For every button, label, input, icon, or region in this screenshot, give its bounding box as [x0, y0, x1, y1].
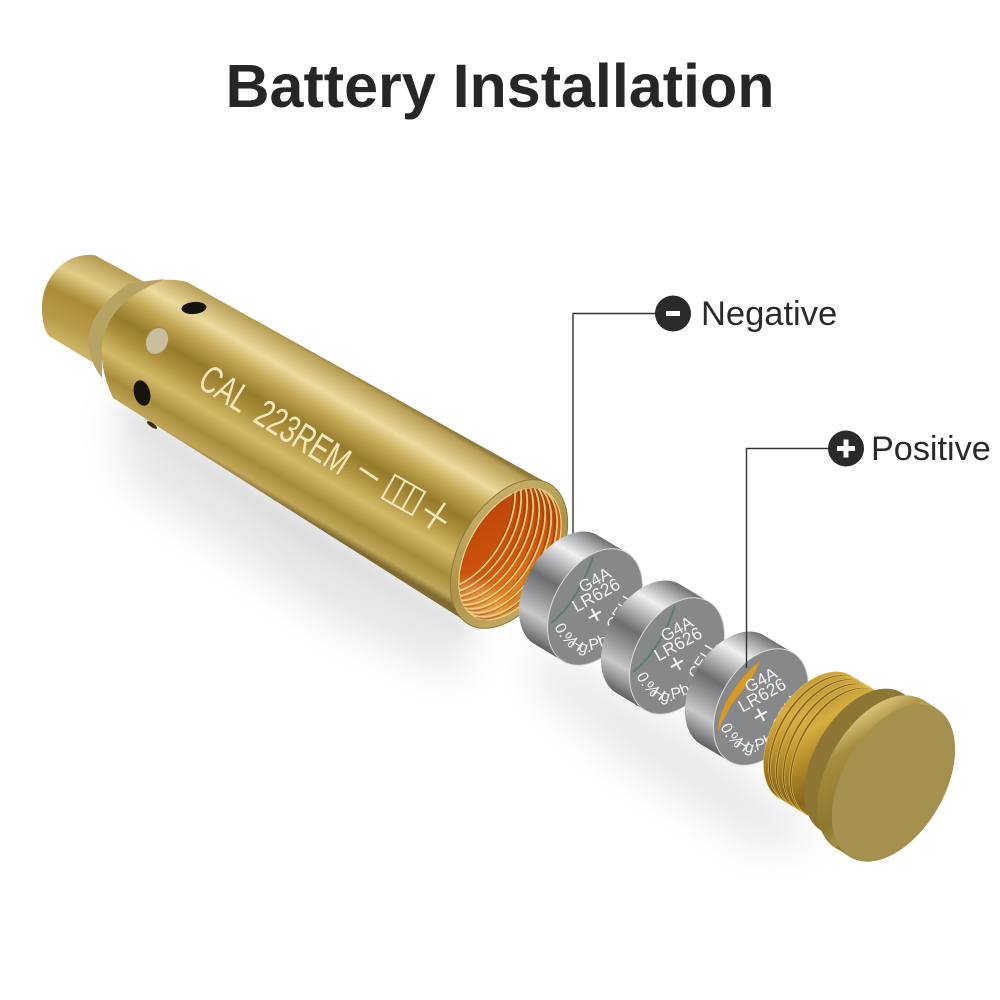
reflection — [633, 606, 675, 672]
orange reflection — [718, 661, 760, 732]
cap face — [806, 683, 981, 883]
battery 3 — [685, 632, 828, 782]
battery markings: + — [580, 597, 609, 632]
black hole top — [181, 301, 207, 315]
leader line: positive — [746, 448, 830, 668]
main cylinder — [102, 280, 549, 624]
negative icon — [655, 296, 691, 332]
bright thread crests — [459, 488, 558, 618]
battery face — [610, 581, 744, 731]
battery side — [685, 632, 792, 762]
neck of the bullet — [42, 255, 150, 362]
small hole bottom edge — [146, 420, 158, 430]
curved marking: 0.%Hg.Pb CELL — [633, 638, 721, 706]
positive text: Positive — [871, 430, 991, 468]
engraved plus — [425, 503, 446, 528]
brass bullet body — [42, 255, 592, 649]
battery face — [528, 532, 662, 682]
black hole lower — [131, 378, 153, 408]
battery markings — [717, 663, 805, 757]
battery face — [694, 632, 828, 782]
battery markings: G4A — [575, 563, 615, 597]
interior — [438, 471, 582, 637]
curved marking: 0.%Hg.Pb CELL — [551, 589, 639, 657]
cap groove — [780, 669, 944, 855]
gold glow at lower threads — [459, 576, 512, 620]
battery markings — [633, 612, 721, 706]
battery 2 — [601, 581, 744, 731]
silver magnet — [141, 324, 173, 358]
battery side — [601, 581, 708, 710]
title: Battery Installation — [226, 52, 774, 120]
battery markings: LR626 — [569, 574, 623, 616]
positive icon — [828, 430, 864, 466]
leader line: negative — [573, 314, 656, 533]
engraved battery box — [382, 475, 425, 515]
battery markings: + — [746, 697, 775, 732]
label: positive — [828, 430, 991, 468]
battery side — [519, 532, 626, 662]
label: negative — [655, 295, 837, 333]
threaded section — [742, 654, 916, 837]
brass end cap — [742, 654, 981, 883]
dark thread grooves — [458, 488, 556, 620]
battery markings: G4A — [741, 663, 781, 697]
reflection — [551, 557, 593, 623]
battery markings — [551, 563, 639, 657]
threaded rim opening — [450, 479, 568, 629]
battery markings: G4A — [657, 612, 697, 646]
engraved text: CAL 223REM — [191, 357, 358, 484]
engraved minus — [360, 468, 378, 480]
negative text: Negative — [701, 295, 837, 333]
battery markings: LR626 — [735, 674, 789, 716]
shoulder band — [88, 279, 165, 378]
rim — [426, 459, 592, 649]
battery 1 — [519, 532, 662, 682]
background shadows — [110, 400, 820, 850]
battery markings: + — [662, 646, 691, 681]
battery markings: LR626 — [651, 623, 705, 665]
cap side — [792, 674, 966, 874]
curved marking: 0.%Hg.Pb CELL — [717, 689, 805, 757]
